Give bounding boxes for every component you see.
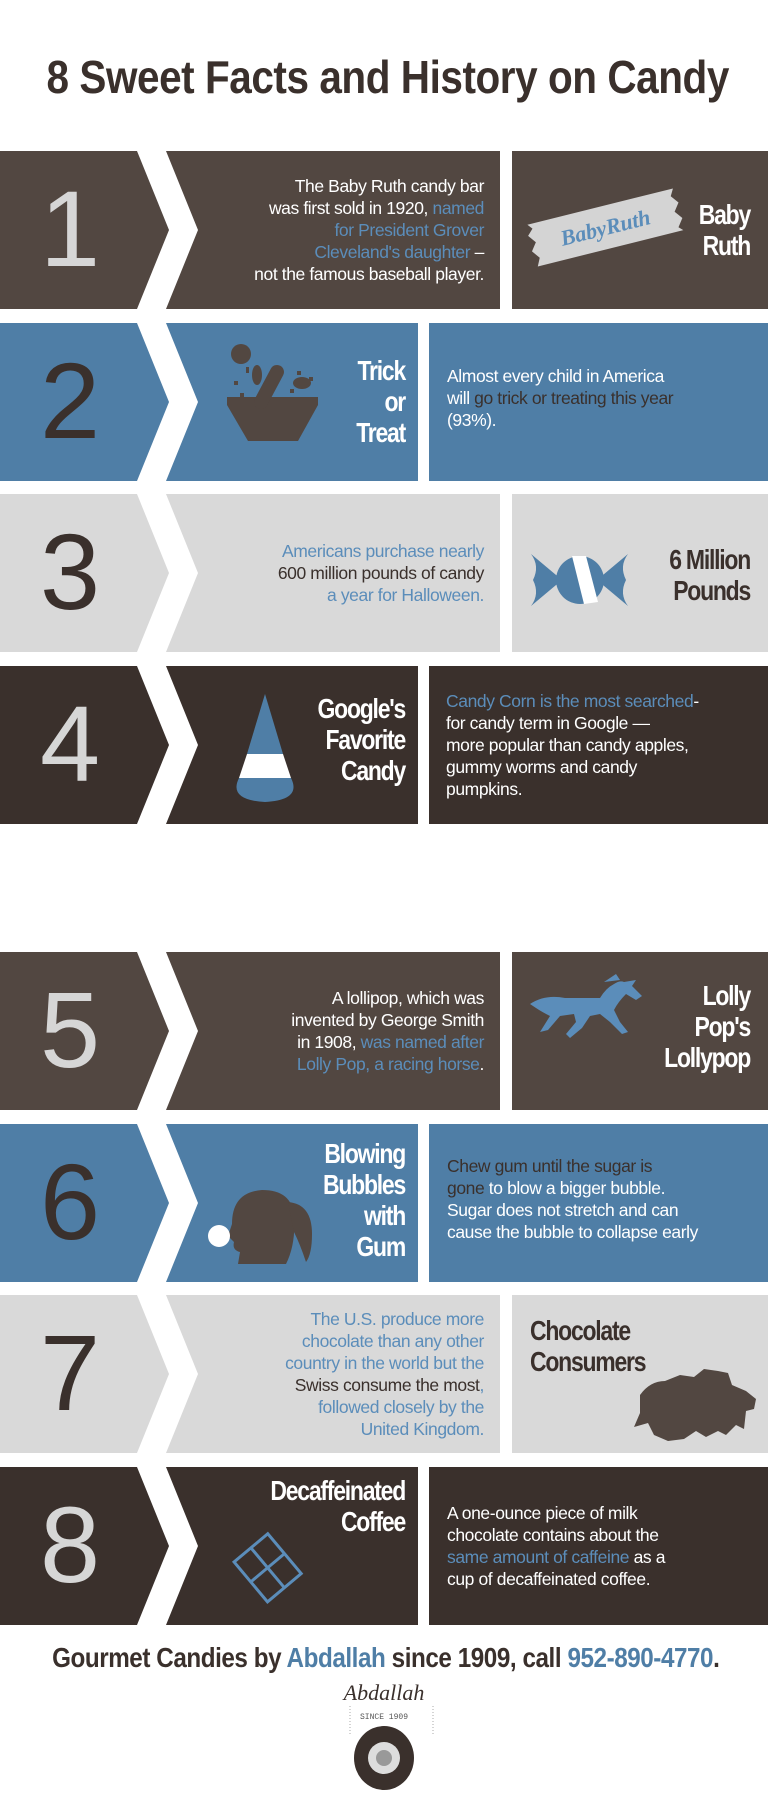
panel: fact 6 [0,1124,768,1282]
panel: fact 2 [0,323,768,481]
text: fact 7 [285,1309,484,1439]
label: Baby Ruth: Baby [699,199,750,230]
text: fact 1: The Baby Ruth candy bar [295,176,484,196]
text: fact 3: a year for Halloween. [327,585,484,605]
text: fact 8: chocolate contains about the [447,1525,659,1545]
footer: contact line: Gourmet Candies by Abdallah since 1909, call 952-890-4770. [52,1642,719,1673]
icon: wrapped candy [531,554,628,606]
label: Blowing Bubbles with Gum: Bubbles [323,1169,405,1200]
text: fact 7: The U.S. produce more [310,1309,484,1329]
panel: fact 5 [0,952,768,1110]
logo: Abdallah: SINCE 1909 [360,1713,408,1722]
text: fact 1: was first sold in 1920, named [269,198,484,218]
text: fact 1: not the famous baseball player. [254,264,484,284]
label: Google's Favorite Candy [318,693,406,786]
panel: fact 4 [0,666,768,824]
label: Chocolate Consumers: Chocolate [530,1315,630,1346]
label: Chocolate Consumers [530,1315,646,1377]
text: fact 6: gone to blow a bigger bubble. [447,1178,665,1198]
panel: fact 3 [0,494,768,652]
logo: Abdallah [342,1680,434,1790]
icon: racing horse [530,974,642,1038]
label: Lolly Pop's Lollypop [664,980,752,1073]
label: Baby Ruth [699,199,752,261]
text: fact 6: cause the bubble to collapse early [447,1222,698,1242]
icon: trick or treat basket [227,344,318,441]
label: Blowing Bubbles with Gum: Blowing [324,1138,405,1169]
text: fact 3: Americans purchase nearly [282,541,484,561]
text: fact 4: pumpkins. [446,779,522,799]
text: fact 7: United Kingdom. [361,1419,484,1439]
number 7: 7 [40,1312,100,1433]
text: fact 3: 600 million pounds of candy [278,563,484,583]
number 5: 5 [40,969,100,1090]
text: fact 5: A lollipop, which was [332,988,484,1008]
label: Trick or Treat [356,355,406,448]
label: 6 Million Pounds: Pounds [673,575,750,606]
text: fact 6: Sugar does not stretch and can [447,1200,678,1220]
text: fact 1: Cleveland's daughter – [314,242,484,262]
panel: fact 7 [0,1295,768,1453]
label: Lolly Pop's Lollypop: Lolly [703,980,750,1011]
text: fact 7: chocolate than any other [302,1331,484,1351]
label: Baby Ruth: Ruth [703,230,750,261]
text: fact 8 [447,1503,666,1589]
text: fact 8: same amount of caffeine as a [447,1547,665,1567]
label: Google's Favorite Candy: Favorite [326,724,405,755]
text: fact 8: A one-ounce piece of milk [447,1503,637,1523]
title: 8 Sweet Facts and History on Candy [47,51,729,103]
text: fact 6 [447,1156,698,1242]
text: fact 3 [278,541,484,605]
icon: girl blowing bubble [208,1190,312,1264]
icon: Baby Ruth wrapper: BabyRuth [557,204,653,251]
icon: Switzerland map [634,1369,756,1441]
label: Trick or Treat: Trick [358,355,405,386]
text: fact 2: will go trick or treating this year [447,388,673,408]
text: fact 7: country in the world but the [285,1353,484,1373]
label: Decaffeinated Coffee: Decaffeinated [270,1475,405,1506]
icon: candy corn [236,694,294,802]
panel: fact 1 [0,151,768,309]
text: fact 2: (93%). [447,410,496,430]
label: Google's Favorite Candy: Candy [341,755,405,786]
label: Decaffeinated Coffee: Coffee [341,1506,405,1537]
number 2: 2 [40,340,100,461]
label: Blowing Bubbles with Gum [323,1138,406,1262]
number 1: 1 [40,168,100,289]
text: fact 2 [447,366,674,430]
icon: chocolate bar [234,1534,301,1602]
text: fact 4 [446,691,699,799]
panel: fact 8 [0,1467,768,1625]
label: Lolly Pop's Lollypop: Lollypop [664,1042,750,1073]
label: Google's Favorite Candy: Google's [318,693,405,724]
label: 6 Million Pounds [669,544,750,606]
number 6: 6 [40,1141,100,1262]
logo: Abdallah: Abdallah [342,1680,424,1705]
label: Trick or Treat: Treat [356,417,405,448]
text: fact 4: Candy Corn is the most searched- [446,691,699,711]
text: fact 6: Chew gum until the sugar is [447,1156,652,1176]
label: Trick or Treat: or [384,386,405,417]
text: fact 2: Almost every child in America [447,366,664,386]
text: fact 5 [291,988,484,1074]
text: fact 8: cup of decaffeinated coffee. [447,1569,650,1589]
text: fact 7: Swiss consume the most, [295,1375,484,1395]
text: fact 4: more popular than candy apples, [446,735,688,755]
text: fact 5: in 1908, was named after [297,1032,484,1052]
number 8: 8 [40,1484,100,1605]
text: fact 1: for President Grover [334,220,484,240]
label: Decaffeinated Coffee [270,1475,406,1537]
text: fact 1 [254,176,484,284]
text: fact 4: for candy term in Google — [446,713,650,733]
text: fact 5: invented by George Smith [291,1010,484,1030]
label: Chocolate Consumers: Consumers [530,1346,645,1377]
number 3: 3 [40,511,100,632]
label: Blowing Bubbles with Gum: Gum [356,1231,405,1262]
label: Lolly Pop's Lollypop: Pop's [695,1011,750,1042]
label: Blowing Bubbles with Gum: with [364,1200,405,1231]
label: 6 Million Pounds: 6 Million [669,544,750,575]
text: fact 4: gummy worms and candy [446,757,637,777]
number 4: 4 [40,683,100,804]
icon: Baby Ruth wrapper [525,188,685,267]
text: fact 7: followed closely by the [318,1397,484,1417]
text: fact 5: Lolly Pop, a racing horse. [297,1054,484,1074]
